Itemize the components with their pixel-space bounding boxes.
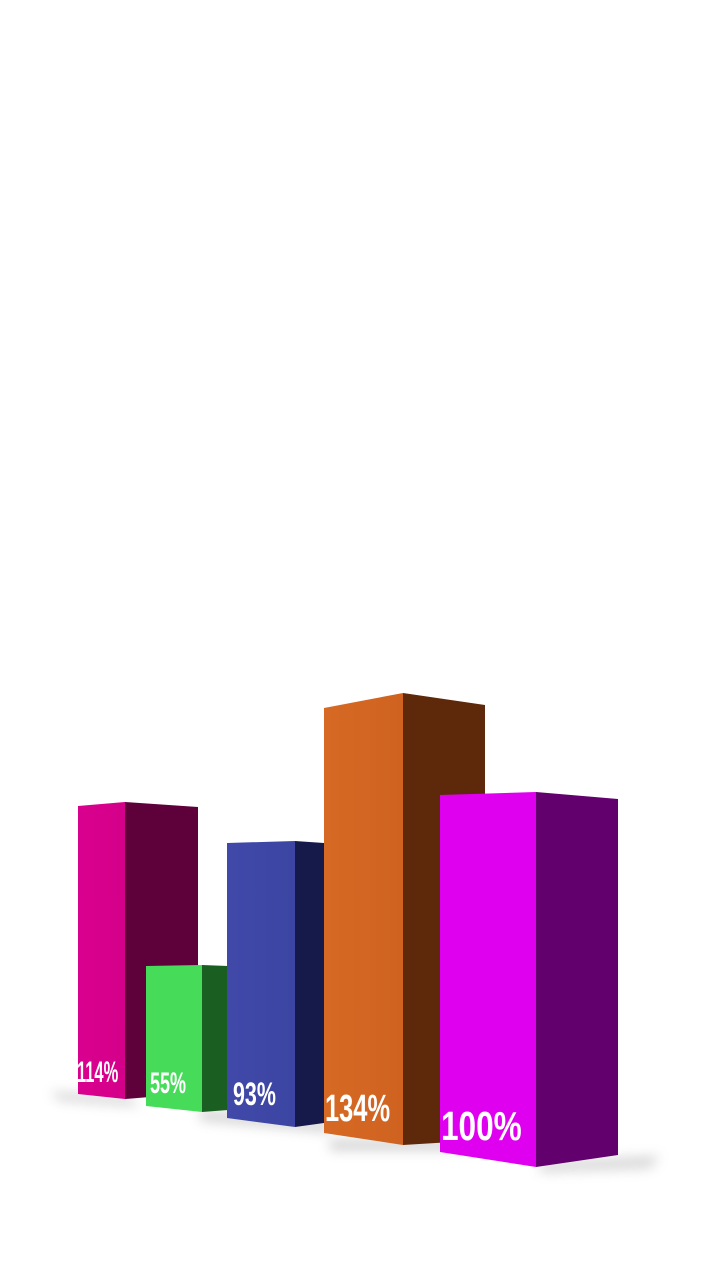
label: 100%: 100% xyxy=(441,1103,522,1149)
bar: 55% green xyxy=(146,965,228,1112)
shadows xyxy=(50,1092,660,1172)
label: 93%: 93% xyxy=(233,1076,276,1112)
bar: 93% blue xyxy=(227,841,324,1127)
label: 55%: 55% xyxy=(150,1068,186,1100)
bar: 100% purple xyxy=(440,792,618,1167)
label: 114%: 114% xyxy=(77,1056,118,1089)
bar: 114% magenta xyxy=(77,802,198,1099)
label: 134%: 134% xyxy=(325,1087,390,1129)
bar: 134% orange xyxy=(324,693,485,1145)
